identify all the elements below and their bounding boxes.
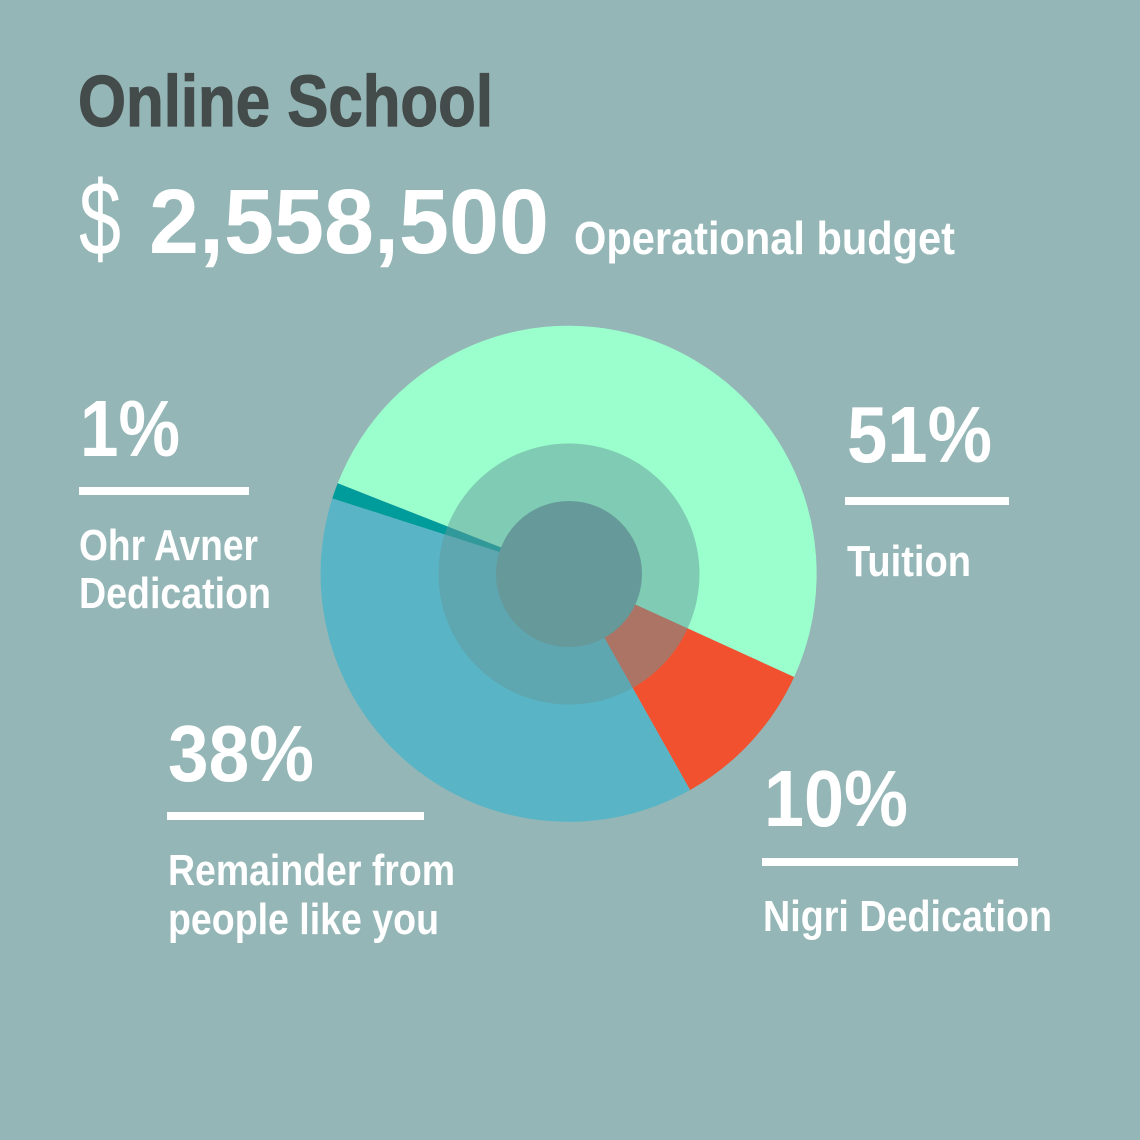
budget headline: [79, 160, 955, 278]
callout: 10%: Nigri Dedication: [763, 892, 1052, 941]
callout: 10%: [762, 754, 1052, 941]
callout: 1%: 1%: [80, 384, 180, 473]
callout: 10%: 10%: [764, 754, 908, 843]
callout: 51%: [845, 390, 1009, 586]
callout: 38%: people like you: [168, 895, 439, 944]
budget label: Operational budget: [574, 212, 955, 264]
callout: 1%: Ohr Avner: [79, 521, 258, 570]
callout: 51%: 51%: [847, 390, 992, 479]
callout: 38%: Remainder from: [168, 846, 455, 895]
callout: 1%: Dedication: [79, 569, 271, 618]
middle ring overlay: [438, 444, 700, 704]
budget amount: 2,558,500: [149, 171, 549, 273]
callout: 1%: [79, 384, 271, 618]
slice: tuition 51%: [338, 326, 817, 677]
center circle: [496, 501, 642, 647]
dollar sign: $: [79, 160, 121, 278]
slice: nigri dedication 10%: [568, 574, 794, 790]
title: Online School: [78, 62, 493, 142]
callout: 38%: [167, 709, 455, 944]
donut chart: [321, 326, 817, 822]
slice: ohr avner 1%: [332, 483, 568, 574]
callout: 38%: 38%: [168, 709, 314, 798]
slice: remainder 38%: [321, 498, 690, 822]
callout: 51%: Tuition: [847, 537, 971, 586]
